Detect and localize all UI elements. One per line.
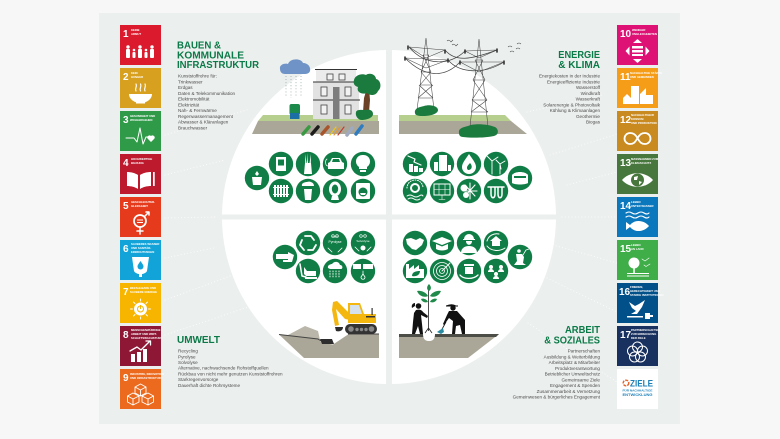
text block: Arbeit list: Ausbildung & Weiterbildung	[544, 354, 600, 359]
logo: Ziele für nachhaltige Entwicklung: FÜR NACHHALTIGE	[622, 388, 652, 392]
tile 1: KEINE	[131, 28, 140, 32]
tile 7	[120, 283, 161, 323]
text block: Bauen list: Elektromobilität	[178, 96, 210, 102]
tile 3: WOHLERGEHEN	[130, 118, 152, 122]
text block: Energie list: Biogas	[586, 120, 601, 124]
tile 17: PARTNERSCHAFTEN	[631, 328, 660, 332]
tile 4	[120, 154, 161, 194]
white circle quadrants	[222, 50, 556, 384]
tile 9: INDUSTRIE, INNOVATION	[130, 372, 164, 376]
tile 16: 16	[619, 287, 631, 298]
icon: rain tank	[296, 179, 320, 203]
icon: radiator	[269, 179, 293, 203]
illustration: tree planting scene	[399, 284, 499, 358]
heading: Bauen & kommunale Infrastruktur: KOMMUNALE	[177, 49, 244, 61]
text block: Energie list: Solarenergie & Photovoltaik	[543, 102, 601, 107]
logo: Ziele für nachhaltige Entwicklung: ENTWICKLUNG	[622, 393, 653, 397]
tile 12: NACHHALTIGE/R	[631, 113, 654, 117]
tile 2: 2	[123, 72, 129, 83]
heading: Energie & Klima: ENERGIE	[558, 49, 600, 61]
SDG tiles left column	[120, 25, 164, 409]
tile 6: SAUBERES WASSER	[131, 242, 159, 246]
tile 14	[617, 197, 658, 237]
tile 15: AN LAND	[631, 247, 644, 251]
tile 2	[120, 68, 161, 108]
tile 6: UND SANITÄR-	[131, 246, 151, 250]
illustration: power pylons	[399, 38, 527, 138]
text block: Arbeit list: Gemeinwesen & bürgerliches Engagement	[513, 395, 601, 400]
icon: cable bundle	[296, 152, 320, 176]
icon: solvolysis: Solvolyse	[356, 239, 370, 243]
text block: Bauen list: Elektrizität	[178, 102, 200, 107]
tile 5	[120, 197, 161, 237]
icon: falling cost bars	[403, 152, 427, 176]
tile 7: SAUBERE ENERGIE	[130, 290, 157, 294]
tile 2: KEIN	[131, 71, 138, 75]
icon group: Arbeit	[403, 231, 532, 283]
tile 3	[120, 111, 161, 151]
icon: toilet	[323, 179, 347, 203]
tile 14: 14	[620, 201, 632, 212]
text block: Umwelt list: Recycling	[178, 349, 198, 354]
icon: recycling	[296, 231, 320, 255]
text block: Arbeit list: Arbeitsplatz & Mitarbeiter	[549, 360, 600, 365]
SDG tiles right column	[617, 25, 664, 409]
heading: Bauen & kommunale Infrastruktur: BAUEN &	[177, 40, 221, 52]
icon: electric car	[323, 152, 347, 176]
tile 7: 7	[123, 287, 129, 298]
tile 15	[617, 240, 658, 280]
tile 11	[617, 68, 662, 108]
icon: hydro power	[403, 179, 427, 203]
icon: industry building	[430, 152, 454, 176]
tile 16	[617, 283, 664, 323]
tile 5: 5	[123, 201, 129, 212]
tile 5: GLEICHHEIT	[131, 204, 148, 208]
text block: Bauen list: Brauchwasser	[178, 125, 208, 130]
text block: Umwelt list: Starkregenvorsorge	[178, 377, 219, 382]
tile 12: UND PRODUKTION	[631, 121, 657, 125]
text block: Arbeit list: Betrieblicher Umweltschutz	[545, 372, 601, 377]
text block: Energie list: Energieeffiziente Industrie	[547, 79, 600, 84]
tile 9: UND INFRASTRUKTUR	[130, 376, 161, 380]
tile 12	[617, 111, 658, 151]
tile 9: 9	[123, 373, 129, 384]
tile 8	[120, 326, 161, 366]
tile 10: UNGLEICHHEITEN	[632, 32, 657, 36]
tile 10: 10	[620, 29, 632, 40]
icon: water drop	[457, 152, 481, 176]
icon: target	[430, 259, 454, 283]
tile 8: SCHAFTSWACHSTUM	[131, 336, 161, 340]
text block: Arbeit list: Zusammenarbeit & Vernetzung	[537, 389, 600, 394]
tile 4: HOCHWERTIGE	[131, 157, 152, 161]
logo: Ziele für nachhaltige Entwicklung	[617, 369, 658, 409]
tile 11: NACHHALTIGE STÄDTE	[630, 71, 662, 75]
icon: hand with gift	[457, 259, 481, 283]
text block: Energie list: Windkraft	[581, 91, 601, 96]
illustration: building scene	[252, 59, 380, 135]
tile 6: EINRICHTUNGEN	[131, 250, 154, 254]
icon: three people	[484, 259, 508, 283]
icon: water cup	[245, 166, 269, 190]
text block: Energie list: Wasserstoff	[576, 85, 601, 90]
tile 15: 15	[620, 244, 632, 255]
heading: Energie & Klima: & KLIMA	[558, 59, 600, 71]
text block: Umwelt list: Pyrolyse	[178, 354, 196, 359]
icon group: Umwelt	[273, 231, 375, 283]
text block: Arbeit list: Gemeinsame Ziele	[561, 377, 600, 382]
icon: cooling and heating	[457, 179, 481, 203]
icon: digger and pipe	[273, 245, 297, 269]
tile 13: 13	[620, 158, 632, 169]
text block: Bauen list: Kunststoffrohre für:	[178, 74, 217, 78]
tile 11: UND GEMEINDEN	[630, 75, 654, 79]
tile 17: 17	[620, 330, 632, 341]
tile 13: KLIMASCHUTZ	[631, 161, 651, 165]
text block: Umwelt list: Dauerhaft dichte Rohrsysteme	[178, 383, 240, 388]
icon: solar panel	[430, 179, 454, 203]
tile 9	[120, 369, 164, 409]
text block: Energie list: Geothermie	[576, 114, 600, 119]
tile 12: KONSUM	[631, 117, 644, 121]
tile 8: MENSCHENWÜRDIGE	[131, 327, 161, 332]
icon: light bulb	[351, 152, 375, 176]
tile 17: ZUR ERREICHUNG	[631, 332, 656, 336]
tile 2: HUNGER	[131, 75, 143, 79]
heading: Bauen & kommunale Infrastruktur: INFRASTRUKTUR	[177, 59, 259, 71]
icon: geothermal pipes	[484, 179, 508, 203]
tile 3: 3	[123, 115, 129, 126]
text block: Bauen list: Nah- & Fernwärme	[178, 108, 217, 113]
icon: excavator	[296, 259, 320, 283]
tile 1	[120, 25, 161, 65]
tile 10: WENIGER	[632, 28, 645, 32]
icon: wind turbines	[484, 152, 508, 176]
tile 16: GERECHTIGKEIT UND	[630, 289, 660, 293]
text block: Energie list: Kühlung & Klimaanlagen	[550, 108, 600, 113]
text block: Bauen list: Abwasser & Kläranlagen	[178, 120, 229, 124]
tile 17: DER ZIELE	[631, 336, 646, 340]
tile 10	[617, 25, 658, 65]
tile 6: 6	[123, 244, 129, 255]
text block: Umwelt list: Alternative, nachwachsende Rohstoffquellen	[178, 366, 269, 371]
text block: Arbeit list: Produktverantwortung	[555, 366, 600, 371]
tile 11: 11	[620, 72, 631, 83]
tile 8: 8	[123, 330, 129, 341]
tile 14: UNTER WASSER	[631, 204, 654, 208]
icon: data device	[269, 152, 293, 176]
text block: Umwelt list: Rückbau von nicht mehr genutzen Kunststoffrohren	[178, 371, 283, 376]
tile 4: 4	[123, 158, 129, 169]
illustration: excavator scene	[279, 301, 379, 358]
text block: Arbeit list: Partnerschaften	[568, 349, 600, 354]
tile 17	[617, 326, 660, 366]
icon: biogas tank	[508, 166, 532, 190]
text block: Umwelt list: Solvolyse	[178, 360, 198, 365]
heading: Arbeit & Soziales: & SOZIALES	[544, 334, 600, 346]
icon: worker	[457, 231, 481, 255]
tile 16: STARKE INSTITUTIONEN	[630, 293, 664, 297]
logo: Ziele für nachhaltige Entwicklung: ZIELE	[630, 378, 653, 388]
icon: handshake	[403, 231, 427, 255]
tile 4: BILDUNG	[131, 161, 144, 165]
icon group: Bauen	[245, 152, 375, 203]
tile 5: GESCHLECHTER-	[131, 200, 155, 204]
icon: hand and house	[484, 231, 508, 255]
tile 14: LEBEN	[631, 200, 640, 204]
icon group: Energie	[403, 152, 532, 203]
icon: person with plant	[508, 245, 532, 269]
icon: pyrolysis: Pyrolyse	[328, 240, 342, 244]
panel: background	[99, 13, 680, 424]
text block: Bauen list: Trinkwasser	[178, 79, 203, 84]
tile 13: MASSNAHMEN ZUM	[631, 157, 659, 161]
tile 13	[617, 154, 659, 194]
tile 12: 12	[620, 115, 632, 126]
text block: Energie list: Wasserkraft	[576, 96, 601, 102]
tile 7: BEZAHLBARE UND	[130, 286, 156, 290]
tile 8: ARBEIT UND WIRT-	[131, 332, 157, 336]
tile 16: FRIEDEN,	[630, 285, 643, 289]
heading: Arbeit & Soziales: ARBEIT	[565, 324, 601, 336]
icon: factory with leaf	[403, 259, 427, 283]
text block: Bauen list: Daten & Telekommunikation	[178, 91, 236, 96]
tile 15: LEBEN	[631, 243, 640, 247]
tile 3: GESUNDHEIT UND	[130, 114, 155, 118]
tile 1: ARMUT	[131, 32, 141, 36]
icon: washing machine	[351, 179, 375, 203]
text block: Bauen list: Erdgas	[178, 85, 193, 90]
icon: heavy rain	[323, 259, 347, 283]
text block: Bauen list: Regenwassermanagement	[178, 114, 234, 119]
text block: Arbeit list: Engagement & Spenden	[550, 383, 600, 388]
icon: sealed pipe	[351, 259, 375, 283]
tile 1: 1	[123, 29, 129, 40]
heading: Umwelt: UMWELT	[177, 334, 221, 346]
text block: Energie list: Energiekosten in der Industrie	[539, 74, 600, 78]
tile 6	[120, 240, 161, 280]
icon: graduation cap	[430, 231, 454, 255]
